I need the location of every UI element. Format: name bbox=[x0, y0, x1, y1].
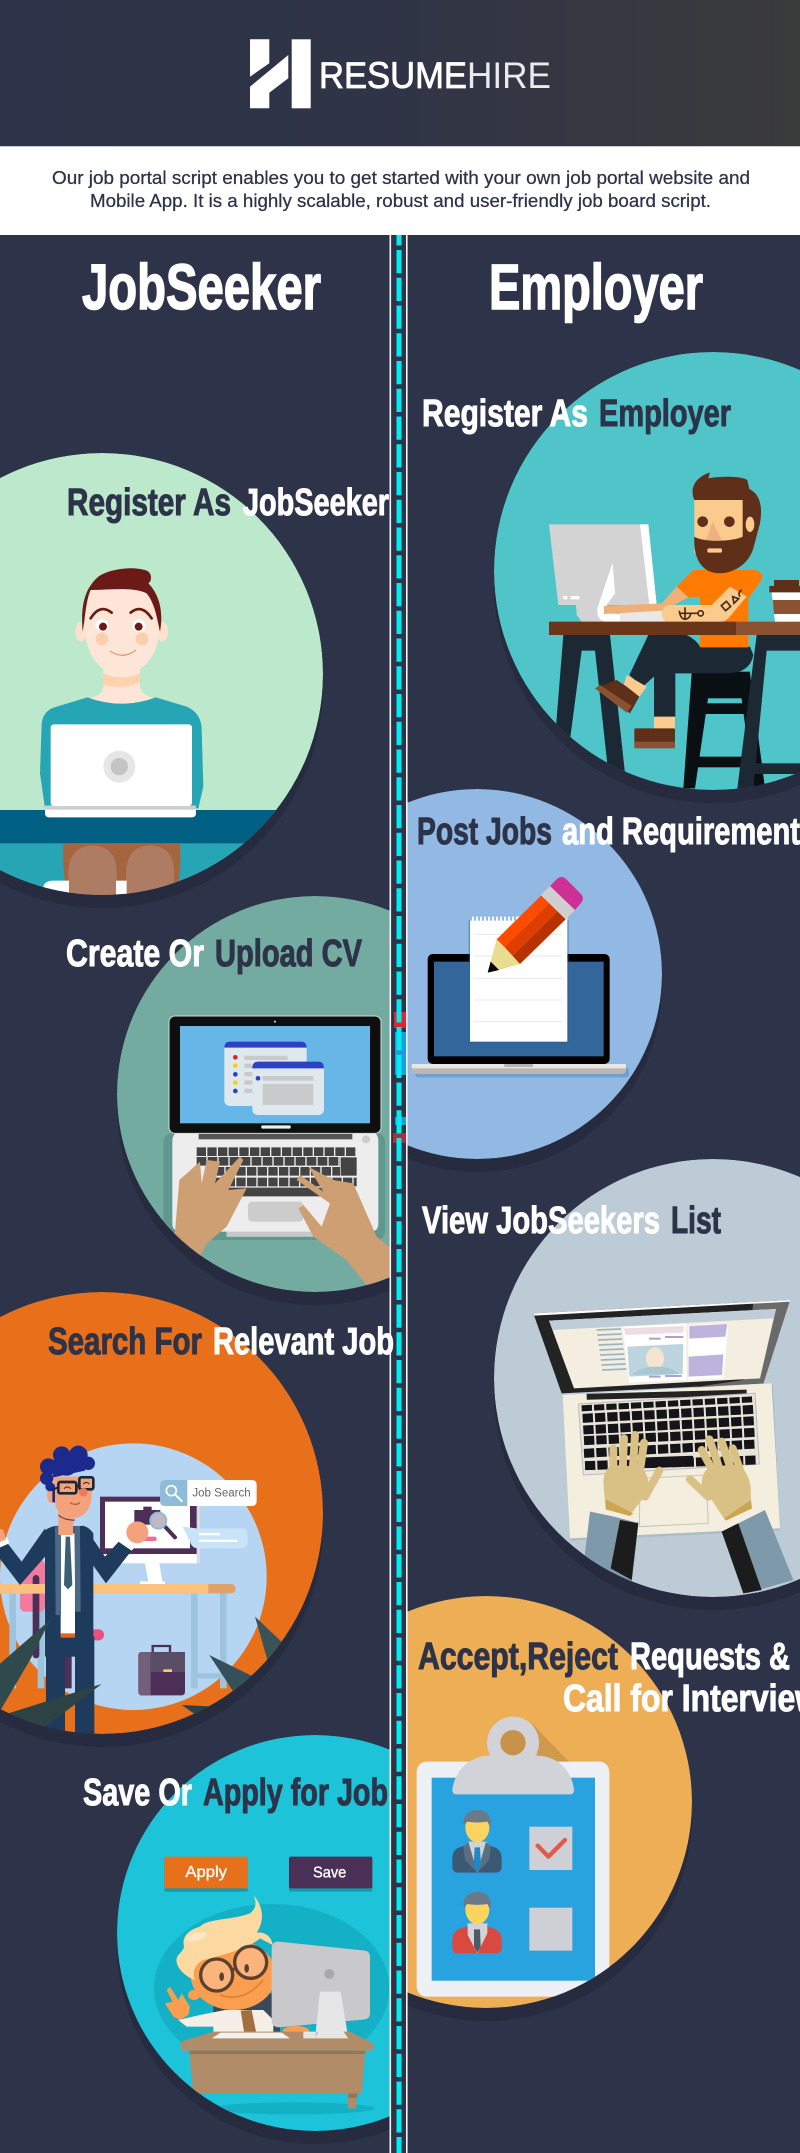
candidate accepted bbox=[452, 1810, 502, 1873]
step title: save or apply for job: Apply for Job bbox=[203, 1772, 388, 1814]
step title: accept reject requests and call for interview: Accept,Reject bbox=[418, 1636, 618, 1678]
intro text line 1: Our job portal script enables you to get started with your own job portal website and bbox=[52, 167, 750, 188]
right hand bbox=[690, 1439, 793, 1593]
step title: save or apply for job bbox=[83, 1772, 388, 1814]
search bar label bbox=[160, 1480, 257, 1506]
step title: view jobseekers list: View JobSeekers bbox=[422, 1200, 660, 1242]
panel: post jobs and requirement bbox=[408, 789, 662, 1159]
step title: register as employer bbox=[422, 393, 731, 435]
step title: search for relevant job: Relevant Job bbox=[213, 1321, 394, 1363]
step title: post jobs and requirement bbox=[417, 811, 800, 853]
coffee cup bbox=[769, 580, 800, 622]
intro band bbox=[0, 146, 800, 235]
step title: register as employer: Employer bbox=[599, 393, 731, 435]
intro text line 2: Mobile App. It is a highly scalable, robust and user-friendly job board script. bbox=[90, 190, 711, 211]
step title: accept reject requests and call for interview bbox=[418, 1636, 800, 1720]
center divider bbox=[390, 235, 408, 2153]
step title: register as jobseeker bbox=[67, 482, 389, 524]
step title: search for relevant job: Search For bbox=[48, 1321, 202, 1363]
illustration: laptop with paper and pencil bbox=[412, 877, 629, 1077]
left column circle panels bbox=[0, 453, 390, 2144]
pencil bbox=[488, 877, 583, 973]
heading: jobseeker: JobSeeker bbox=[82, 251, 321, 323]
step title: register as employer: Register As bbox=[422, 393, 588, 435]
apply button: Apply bbox=[185, 1864, 227, 1881]
illustration: job search man bbox=[0, 1443, 283, 1737]
step title: search for relevant job bbox=[48, 1321, 394, 1363]
logo wordmark: RESUME bbox=[319, 55, 467, 96]
heading: employer: Employer bbox=[489, 251, 703, 323]
empty box bbox=[529, 1908, 572, 1951]
right column circle panels bbox=[408, 352, 800, 2021]
step title: view jobseekers list: List bbox=[671, 1200, 721, 1242]
leaves bbox=[0, 1617, 283, 1728]
illustration: man with laptop bbox=[0, 568, 276, 895]
step title: register as jobseeker: Register As bbox=[67, 482, 231, 524]
step title: post jobs and requirement: Post Jobs bbox=[417, 811, 552, 853]
check box bbox=[529, 1827, 572, 1870]
candidate pending bbox=[452, 1892, 502, 1953]
illustration: laptop with hands bbox=[150, 1016, 393, 1285]
illustration: clipboard bbox=[417, 1717, 609, 1997]
search bar label: Job Search bbox=[192, 1485, 251, 1499]
panel: accept reject requests bbox=[408, 1596, 692, 2008]
illustration: bearded man at desk bbox=[549, 472, 800, 788]
save button bbox=[289, 1857, 372, 1892]
illustration: top-down laptop bbox=[533, 1300, 793, 1593]
apply button bbox=[164, 1857, 248, 1892]
illustration: apply and save bbox=[154, 1857, 389, 2114]
panel: create or upload cv bbox=[117, 896, 390, 1292]
step title: create or upload cv bbox=[66, 933, 362, 975]
panel: register as employer bbox=[494, 352, 800, 790]
panel: register as jobseeker bbox=[0, 453, 323, 895]
step title: register as jobseeker: JobSeeker bbox=[243, 482, 389, 524]
panel: view jobseekers list bbox=[494, 1159, 800, 1597]
logo wordmark light part: HIRE bbox=[467, 55, 551, 96]
person bbox=[0, 1446, 148, 1737]
logo mark bbox=[250, 39, 311, 108]
step title: create or upload cv: Create Or bbox=[66, 933, 204, 975]
stool bbox=[683, 672, 765, 788]
step title: save or apply for job: Save Or bbox=[83, 1772, 192, 1814]
panel: save or apply for job bbox=[117, 1735, 390, 2131]
panel: search for relevant job bbox=[0, 1292, 323, 1737]
save button: Save bbox=[313, 1864, 346, 1881]
left hand and sleeve bbox=[583, 1435, 659, 1583]
step title: create or upload cv: Upload CV bbox=[215, 933, 362, 975]
briefcase bbox=[138, 1646, 185, 1695]
header band bbox=[0, 0, 800, 146]
